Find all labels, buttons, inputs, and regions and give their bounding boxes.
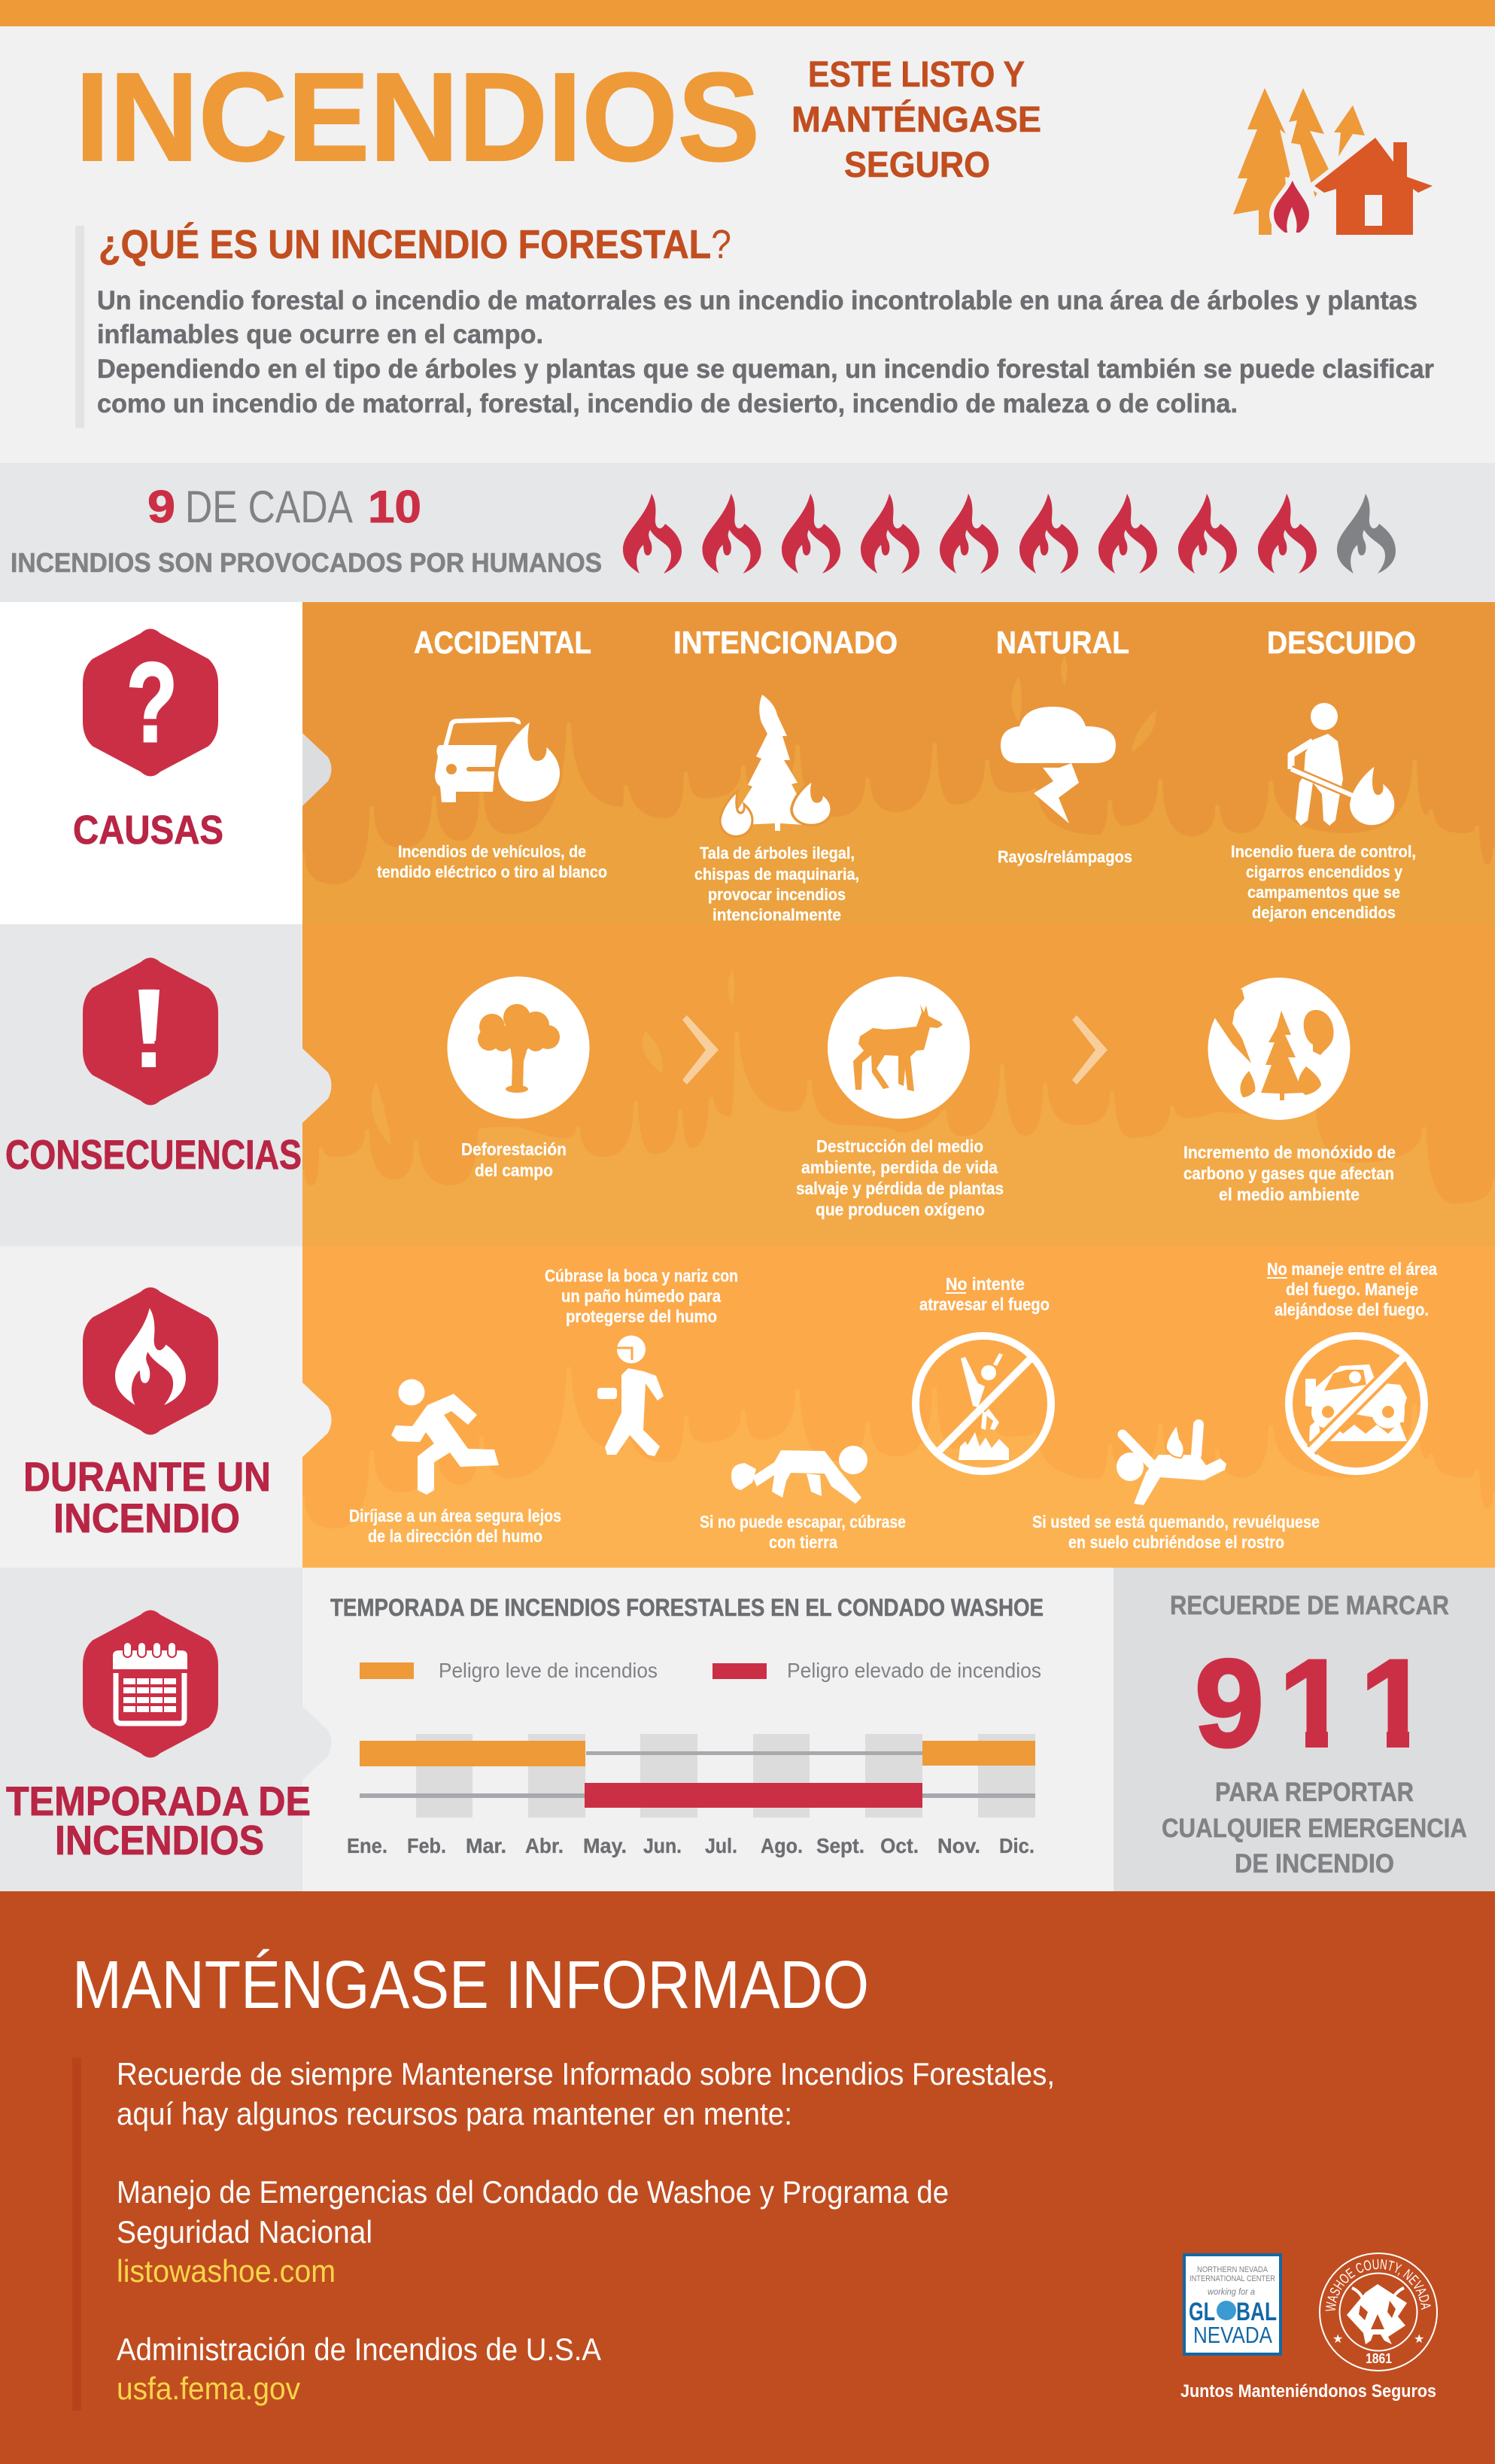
- item: habitat destruction: Destrucción del medio: [816, 1136, 983, 1156]
- column: natural: Rayos/relámpagos: [998, 847, 1132, 866]
- heading: temporada de incendios: TEMPORADA DE: [6, 1778, 311, 1824]
- statistic headline: 9: [147, 482, 175, 532]
- logo: washoe county seal: WASHOE COUNTY, NEVADA: [1326, 2259, 1431, 2311]
- column: intencionado: [673, 625, 898, 924]
- column: accidental: Incendios de vehículos, de: [398, 842, 586, 861]
- icon: masked walking person: [597, 1335, 664, 1456]
- column: intencionado: INTENCIONADO: [673, 625, 898, 660]
- panel: stay informed footer: [0, 1891, 1495, 2464]
- item: carbon monoxide: carbono y gases que afectan: [1183, 1164, 1394, 1183]
- statistic headline: 10: [368, 482, 421, 532]
- month labels: Jun.: [643, 1834, 682, 1857]
- statistic headline: DE CADA: [185, 482, 353, 532]
- item: roll on the ground: en suelo cubriéndose el rostro: [1068, 1532, 1284, 1552]
- text block: definition: inflamables que ocurre en el campo.: [97, 320, 543, 349]
- item: cover mouth: protegerse del humo: [566, 1307, 717, 1326]
- column: intencionado: provocar incendios: [708, 885, 846, 904]
- month labels: Jul.: [705, 1834, 737, 1857]
- statistic caption: INCENDIOS SON PROVOCADOS POR HUMANOS: [11, 547, 602, 578]
- side rule: [75, 226, 84, 428]
- tagline: Juntos Manteniéndonos Seguros: [1180, 2381, 1436, 2402]
- chart: fire danger by month: [347, 1734, 1035, 1857]
- logo: washoe county seal: 1861: [1366, 2351, 1392, 2366]
- logo: global nevada: working for a: [1208, 2286, 1255, 2297]
- item: habitat destruction: [796, 977, 1004, 1219]
- panel: call 911: RECUERDE DE MARCAR: [1170, 1591, 1449, 1620]
- icon: question hexagon: [83, 629, 218, 777]
- text block: definition: [97, 286, 1434, 418]
- logo: washoe county seal: ★: [1414, 2333, 1424, 2346]
- text block: resources: Seguridad Nacional: [117, 2214, 372, 2250]
- column: descuido: cigarros encendidos y: [1246, 862, 1403, 881]
- heading: causas: CAUSAS: [73, 808, 223, 853]
- heading: temporada de incendios: INCENDIOS: [55, 1817, 264, 1863]
- item: carbon monoxide: el medio ambiente: [1219, 1185, 1360, 1204]
- text block: resources: Administración de Incendios de U.S.A: [117, 2332, 601, 2367]
- panel: causes: [0, 602, 1495, 924]
- column: intencionado: intencionalmente: [713, 905, 841, 924]
- panel: 9 of 10 statistic: [0, 463, 1495, 602]
- item: cover with earth: [700, 1446, 906, 1552]
- text block: resources: Manejo de Emergencias del Condado de Washoe y Programa de: [117, 2174, 949, 2210]
- heading: manténgase informado: MANTÉNGASE INFORMADO: [72, 1948, 869, 2023]
- item: habitat destruction: que producen oxígeno: [816, 1200, 985, 1219]
- text block: definition: Un incendio forestal o incendio de matorrales es un incendio incontrolable en una área de árboles y plantas: [97, 286, 1417, 315]
- column: descuido: DESCUIDO: [1267, 625, 1416, 660]
- item: roll on the ground: Si usted se está quemando, revuélquese: [1032, 1512, 1320, 1532]
- item: cover mouth: [545, 1266, 738, 1456]
- chart title: TEMPORADA DE INCENDIOS FORESTALES EN EL CONDADO WASHOE: [330, 1594, 1044, 1621]
- icon: flame hexagon: [83, 1287, 218, 1434]
- item: roll on the ground: [1032, 1425, 1320, 1552]
- column: descuido: Incendio fuera de control,: [1231, 842, 1416, 861]
- item: run to a safe area: de la dirección del humo: [368, 1526, 542, 1546]
- panel: consequences: [0, 924, 1495, 1246]
- month labels: May.: [583, 1834, 627, 1857]
- text block: resources: listowashoe.com: [117, 2253, 336, 2289]
- arrow: [682, 1015, 719, 1084]
- month labels: Ene.: [347, 1834, 387, 1857]
- heading: durante un incendio: DURANTE UN: [23, 1453, 271, 1500]
- text block: resources: usfa.fema.gov: [117, 2371, 300, 2406]
- item: cover mouth: Cúbrase la boca y nariz con: [545, 1266, 738, 1285]
- column: descuido: campamentos que se: [1247, 883, 1400, 902]
- title: INCENDIOS: [75, 47, 760, 187]
- item: run to a safe area: Diríjase a un área segura lejos: [349, 1506, 561, 1526]
- icon: exclamation hexagon: !: [132, 965, 166, 1091]
- column: accidental: tendido eléctrico o tiro al blanco: [377, 862, 607, 881]
- icon: trees, flame and house: [1233, 88, 1433, 235]
- item: do not drive: del fuego. Maneje: [1286, 1279, 1418, 1299]
- icon: exclamation hexagon: [83, 957, 218, 1105]
- item: run to a safe area: [349, 1379, 561, 1546]
- logo: washoe county seal: ★: [1332, 2333, 1343, 2346]
- logo: global nevada: NORTHERN NEVADA: [1197, 2265, 1269, 2274]
- logo: global nevada: BAL: [1236, 2298, 1277, 2326]
- icon: crawling person: [731, 1446, 867, 1504]
- subtitle: SEGURO: [844, 145, 990, 185]
- item: do not drive: [1267, 1259, 1437, 1471]
- arrow: [1072, 1015, 1107, 1084]
- icon: person with shovel and fire: [1291, 703, 1394, 826]
- text block: resources: aquí hay algunos recursos para mantener en mente:: [117, 2096, 792, 2131]
- icons: ten flames: [623, 494, 1396, 573]
- month labels: [347, 1834, 1035, 1857]
- icon: no driving sign: [1289, 1336, 1424, 1471]
- item: deforestation: [447, 977, 590, 1180]
- logo: global nevada: [1184, 2255, 1281, 2354]
- text block: definition: como un incendio de matorral, forestal, incendio de desierto, incendio de maleza o de colina.: [97, 389, 1238, 418]
- icon: calendar hexagon: [83, 1611, 218, 1758]
- text block: definition: Dependiendo en el tipo de árboles y plantas que se queman, un incendio forestal también se puede clasificar: [97, 354, 1434, 384]
- column: descuido: dejaron encendidos: [1252, 903, 1396, 922]
- column: intencionado: chispas de maquinaria,: [694, 865, 859, 884]
- column: intencionado: Tala de árboles ilegal,: [700, 844, 855, 862]
- heading: durante un incendio: [23, 1453, 271, 1541]
- item: do not drive: No maneje entre el área: [1267, 1259, 1437, 1279]
- item: cover with earth: Si no puede escapar, cúbrase: [700, 1512, 906, 1532]
- icon: no crossing sign: [916, 1336, 1051, 1471]
- icon: tree circle: [447, 977, 590, 1118]
- month labels: Feb.: [407, 1834, 446, 1857]
- item: do not cross fire: atravesar el fuego: [919, 1294, 1050, 1314]
- panel: fire season: [0, 1568, 1114, 1891]
- panel: during a fire: [0, 1246, 1495, 1568]
- column: natural: NATURAL: [996, 625, 1129, 660]
- item: habitat destruction: salvaje y pérdida de plantas: [796, 1179, 1004, 1198]
- column: accidental: ACCIDENTAL: [414, 625, 591, 660]
- item: do not drive: alejándose del fuego.: [1275, 1300, 1429, 1319]
- panel: call 911: [1114, 1568, 1495, 1891]
- number 911: 911: [1195, 1634, 1430, 1772]
- item: cover mouth: un paño húmedo para: [561, 1286, 721, 1306]
- legend: [360, 1659, 1041, 1682]
- item: carbon monoxide: [1183, 978, 1396, 1204]
- logo: global nevada: INTERNATIONAL CENTER: [1190, 2274, 1275, 2283]
- column: accidental: [377, 625, 607, 881]
- item: cover with earth: con tierra: [769, 1532, 837, 1552]
- item: do not cross fire: [916, 1274, 1051, 1471]
- month labels: Mar.: [466, 1834, 506, 1857]
- heading: consecuencias: CONSECUENCIAS: [5, 1131, 302, 1178]
- icon: question hexagon: ?: [126, 639, 178, 765]
- item: habitat destruction: ambiente, perdida de vida: [801, 1157, 998, 1177]
- logo: washoe county seal: [1319, 2253, 1438, 2371]
- panel: call 911: DE INCENDIO: [1235, 1849, 1394, 1878]
- subtitle: ESTE LISTO Y: [808, 55, 1025, 95]
- month labels: Dic.: [999, 1834, 1035, 1857]
- icon: burning car: [435, 719, 561, 803]
- logo: global nevada: GL: [1189, 2298, 1215, 2326]
- top bar: [0, 0, 1495, 26]
- item: deforestation: Deforestación: [461, 1139, 567, 1159]
- item: carbon monoxide: Incremento de monóxido de: [1183, 1142, 1396, 1162]
- month labels: Sept.: [816, 1834, 864, 1857]
- column: descuido: [1231, 625, 1416, 922]
- icon: storm cloud with lightning: [1001, 707, 1116, 823]
- legend: Peligro leve de incendios: [439, 1659, 658, 1682]
- heading: durante un incendio: INCENDIO: [53, 1495, 240, 1541]
- column: natural: [996, 625, 1132, 866]
- icon: burning person: [1117, 1425, 1226, 1505]
- logo: global nevada: NEVADA: [1193, 2322, 1272, 2348]
- legend: Peligro elevado de incendios: [787, 1659, 1041, 1682]
- icon: deer circle: [828, 977, 970, 1118]
- panel: call 911: PARA REPORTAR: [1215, 1778, 1414, 1807]
- text block: resources: Recuerde de siempre Mantenerse Informado sobre Incendios Forestales,: [117, 2056, 1055, 2091]
- month labels: Abr.: [525, 1834, 564, 1857]
- heading: temporada de incendios: [6, 1778, 311, 1863]
- subtitle: MANTÉNGASE: [791, 99, 1041, 140]
- month labels: Oct.: [880, 1834, 919, 1857]
- icon: running person: [391, 1379, 499, 1495]
- panel: call 911: CUALQUIER EMERGENCIA: [1162, 1814, 1467, 1843]
- text block: resources: [117, 2056, 1055, 2406]
- item: do not cross fire: No intente: [946, 1274, 1025, 1294]
- side rule: [72, 2058, 81, 2411]
- icon: smoke and tree circle: [1204, 978, 1350, 1120]
- icon: burning tree: [720, 695, 831, 836]
- panel: header: [0, 26, 1495, 463]
- item: deforestation: del campo: [475, 1161, 553, 1180]
- month labels: Nov.: [937, 1834, 980, 1857]
- month labels: Ago.: [761, 1834, 803, 1857]
- subtitle: [791, 55, 1041, 185]
- heading: what is a wildfire: ¿QUÉ ES UN INCENDIO FORESTAL?: [99, 222, 731, 267]
